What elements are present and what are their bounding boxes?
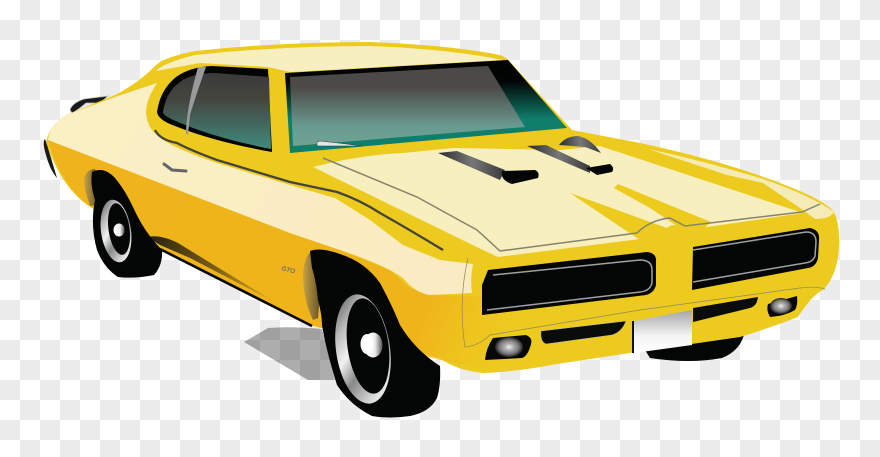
hood crease line xyxy=(323,158,820,251)
left fog light xyxy=(485,335,531,360)
rear edge trim xyxy=(44,139,57,178)
rocker line xyxy=(160,249,312,326)
right grille xyxy=(692,228,819,290)
fender seam xyxy=(462,258,825,347)
wiper xyxy=(317,141,362,146)
window divider xyxy=(186,67,206,135)
roof xyxy=(156,46,503,72)
front wheel xyxy=(303,250,440,418)
left grille xyxy=(482,252,656,315)
yellow hood wedges xyxy=(570,193,692,240)
right bumper slot xyxy=(693,297,758,322)
car illustration xyxy=(44,42,839,418)
windshield xyxy=(285,60,567,153)
belt line xyxy=(155,130,443,250)
door handle xyxy=(164,164,186,171)
car shadow on the ground xyxy=(244,327,335,380)
cream upper side panel xyxy=(48,83,473,295)
license plate xyxy=(632,310,692,353)
rocker shadow xyxy=(147,236,282,306)
far front wheel xyxy=(645,330,745,361)
left bumper slot xyxy=(541,321,626,344)
car body xyxy=(46,42,839,373)
rear side window xyxy=(157,66,272,152)
hood scoop left xyxy=(438,151,539,184)
badge: GTO xyxy=(280,265,296,276)
rear wheel xyxy=(84,169,162,278)
rear spoiler xyxy=(70,96,108,113)
hood scoop rear xyxy=(559,136,601,153)
right fog light xyxy=(767,296,797,317)
fender top highlight xyxy=(648,149,834,219)
lower side panel xyxy=(48,140,530,372)
hood xyxy=(313,146,803,257)
hood scoop right xyxy=(527,145,613,175)
